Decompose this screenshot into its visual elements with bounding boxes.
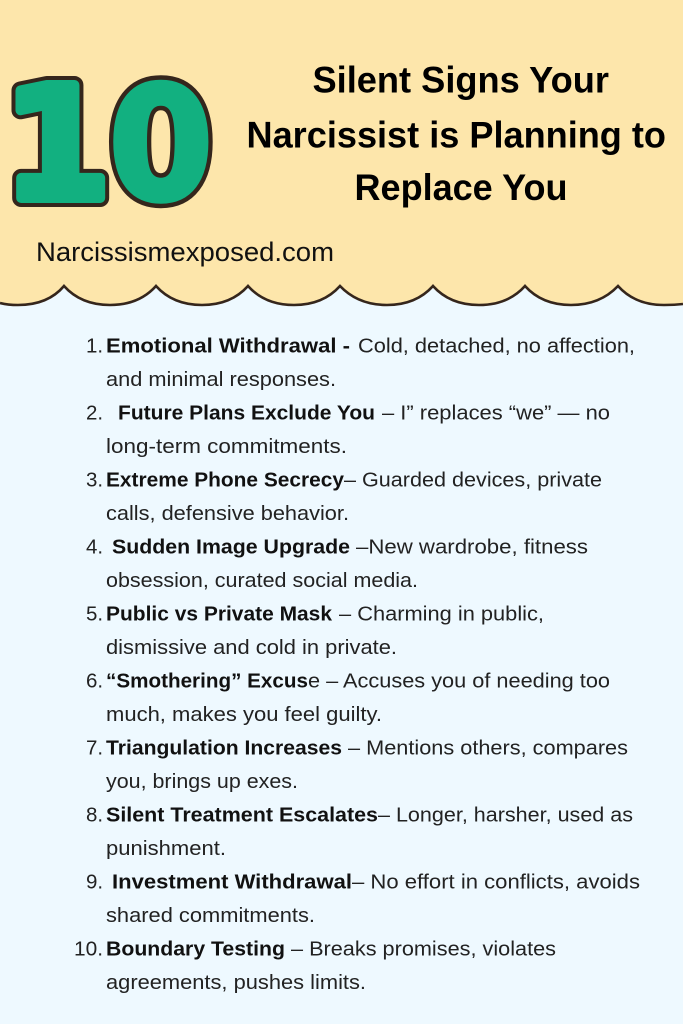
item 1: and minimal responses. (106, 368, 336, 391)
item 1 (86, 335, 635, 391)
item 3: calls, defensive behavior. (106, 502, 349, 525)
item 8: 8. (86, 804, 103, 826)
title: Narcissist is Planning to (246, 114, 666, 155)
item 4: –New wardrobe, fitness (356, 536, 588, 558)
website name: Narcissismexposed.com (36, 237, 334, 267)
item 8: Silent Treatment Escalates (106, 804, 378, 826)
item 2: 2. (86, 402, 103, 424)
big number 10: 0 (109, 53, 213, 235)
header panel with scalloped edge (0, 0, 683, 305)
item 6: 6. (86, 670, 103, 692)
big number 10: 1 (3, 54, 111, 235)
item 8: punishment. (106, 837, 226, 860)
item 6: e – Accuses you of needing too (308, 670, 610, 692)
item 8 (86, 804, 633, 860)
big number 10 (3, 53, 213, 235)
item 7: – Mentions others, compares (348, 736, 628, 760)
item 8: – Longer, harsher, used as (378, 804, 633, 826)
item 2: – I” replaces “we” — no (382, 402, 610, 424)
item 5: dismissive and cold in private. (106, 636, 397, 659)
item 7: Triangulation Increases (106, 736, 342, 760)
item 2: Future Plans Exclude You (118, 402, 375, 424)
item 10: Boundary Testing (106, 938, 285, 960)
item 10 (74, 938, 556, 994)
numbered list (74, 335, 640, 994)
item 7: you, brings up exes. (106, 770, 298, 793)
item 4: 4. (86, 536, 103, 558)
item 9: 9. (86, 870, 103, 894)
item 3: Extreme Phone Secrecy (106, 468, 345, 492)
item 5: Public vs Private Mask (106, 602, 333, 626)
title: Silent Signs Your (312, 60, 609, 101)
item 6 (86, 670, 610, 726)
item 7: 7. (86, 736, 103, 760)
scalloped edge outline (0, 286, 683, 305)
item 9: – No effort in conflicts, avoids (352, 870, 640, 894)
item 2: long-term commitments. (106, 435, 347, 458)
title: Replace You (354, 167, 568, 208)
item 4 (86, 536, 588, 592)
item 3 (86, 468, 602, 525)
item 3: – Guarded devices, private (344, 468, 602, 492)
item 4: obsession, curated social media. (106, 569, 418, 592)
item 7 (86, 736, 628, 793)
item 9: shared commitments. (106, 904, 315, 927)
item 2 (86, 402, 610, 458)
item 4: Sudden Image Upgrade (112, 536, 350, 558)
title (246, 60, 666, 208)
item 3: 3. (86, 468, 103, 492)
item 10: – Breaks promises, violates (291, 938, 556, 960)
item 5: 5. (86, 602, 103, 626)
item 5: – Charming in public, (339, 602, 544, 626)
item 6: “Smothering” Excus (106, 670, 308, 692)
item 9 (86, 870, 640, 927)
item 1: Cold, detached, no affection, (358, 335, 635, 358)
big number 10: 1 (3, 54, 111, 235)
item 9: Investment Withdrawal (112, 870, 352, 894)
item 10: 10. (74, 938, 103, 960)
item 5 (86, 602, 544, 659)
item 10: agreements, pushes limits. (106, 971, 366, 994)
item 6: much, makes you feel guilty. (106, 703, 382, 726)
big number 10: 0 (109, 53, 213, 235)
item 1: Emotional Withdrawal - (106, 335, 350, 358)
item 1: 1. (86, 335, 103, 358)
